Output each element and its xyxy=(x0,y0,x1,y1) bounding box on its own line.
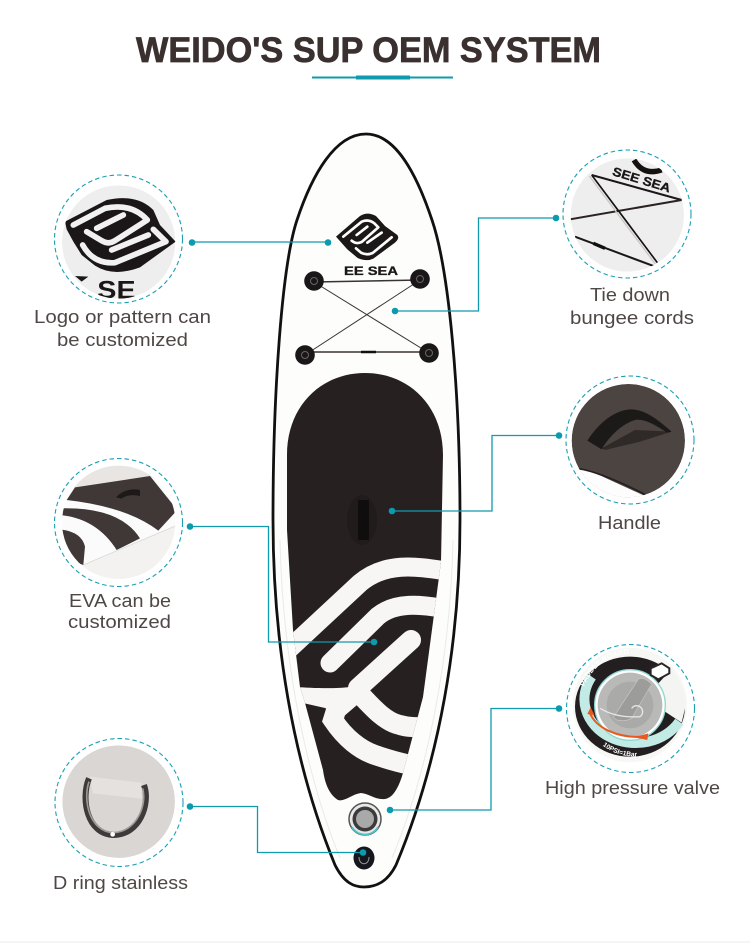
EVA photo xyxy=(62,466,176,579)
title: WEIDO'S SUP OEM SYSTEM xyxy=(136,30,601,70)
label: logo: be customized xyxy=(57,329,188,350)
tie down photo: SEE SEA xyxy=(611,164,672,195)
paddle board xyxy=(273,134,460,887)
EVA dashed ring xyxy=(54,458,182,586)
handle photo xyxy=(572,384,685,503)
callout: valve xyxy=(566,644,696,773)
callout: tie down xyxy=(563,150,691,278)
valve dashed ring xyxy=(566,644,694,772)
connector: EVA xyxy=(187,523,377,645)
valve photo: PADDLE BOARD xyxy=(580,650,628,686)
label: tie down xyxy=(570,284,694,328)
label: valve: High pressure valve xyxy=(545,777,720,798)
connector: tie down xyxy=(392,215,559,314)
label: logo: Logo or pattern can xyxy=(34,306,211,327)
title underline xyxy=(312,76,453,80)
board logo xyxy=(336,214,398,260)
label: D ring: D ring stainless xyxy=(53,872,188,893)
carry handle xyxy=(347,495,377,545)
D rings xyxy=(295,269,439,365)
label: handle: Handle xyxy=(598,512,661,533)
label: tie down: Tie down xyxy=(590,284,670,305)
logo photo: SE xyxy=(97,276,136,304)
callout: D ring xyxy=(55,738,183,866)
connector: logo xyxy=(189,239,331,246)
connector: valve xyxy=(387,705,562,813)
board outline xyxy=(273,134,460,887)
D ring photo xyxy=(62,745,175,858)
valve photo xyxy=(573,648,687,762)
connector: D ring xyxy=(187,803,366,856)
callout: logo xyxy=(54,175,182,304)
label: EVA xyxy=(68,590,171,632)
label: logo xyxy=(34,306,211,350)
label: EVA: EVA can be xyxy=(69,590,171,611)
pressure valve xyxy=(349,803,381,835)
EVA traction pad xyxy=(287,373,443,800)
logo dashed ring xyxy=(54,175,182,303)
callout: EVA xyxy=(54,458,182,586)
handle dashed ring xyxy=(566,376,694,504)
label: EVA: customized xyxy=(68,611,171,632)
bungee cords xyxy=(305,280,429,355)
board logo text: EE SEA xyxy=(344,266,398,278)
connector: handle xyxy=(389,432,562,514)
tie down dashed ring xyxy=(563,150,691,278)
callout: handle xyxy=(566,376,694,504)
label: tie down: bungee cords xyxy=(570,307,694,328)
tail D ring xyxy=(354,846,374,870)
D ring dashed ring xyxy=(55,738,183,866)
valve photo: 10PSI=1Bar xyxy=(602,742,637,756)
